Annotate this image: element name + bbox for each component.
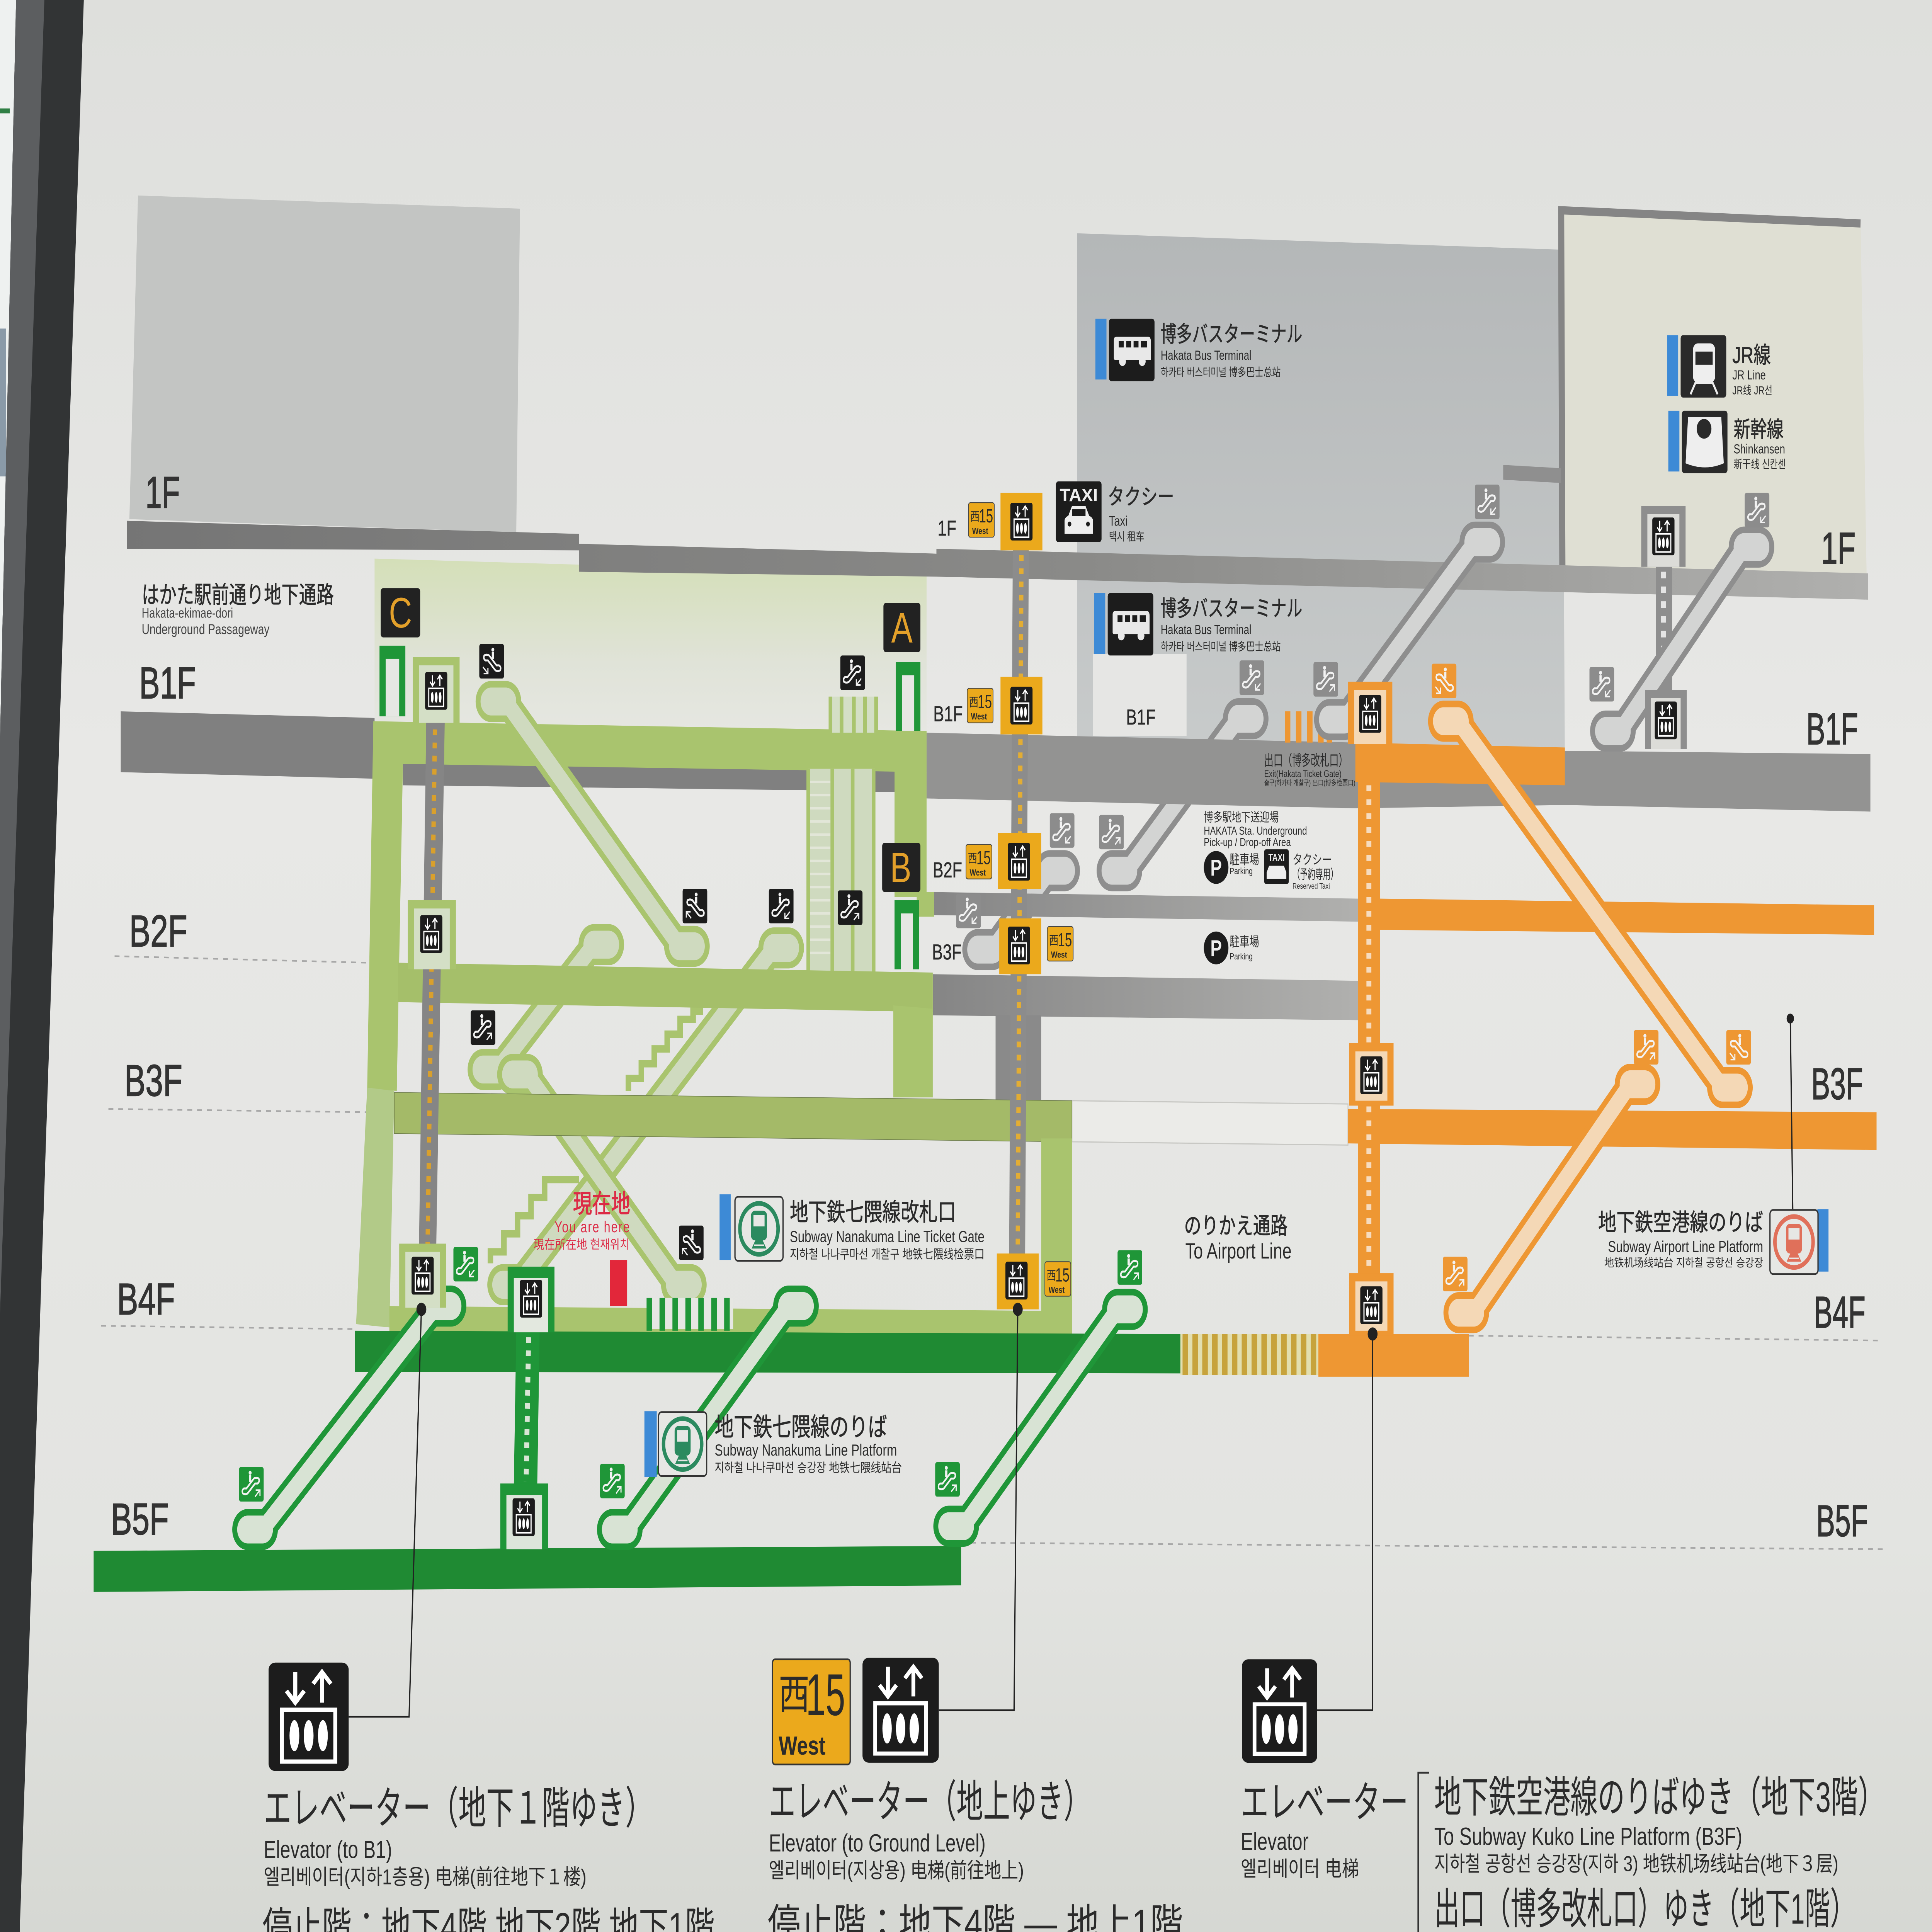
text: Hakata-ekimae-dori passage: Underground Passageway [142,621,270,638]
floor labels right [1806,523,1868,1546]
floor labels centre: B3F [932,940,961,964]
label: JR line: JR線 [1732,342,1771,368]
icon: west 15 bottom: 15 [806,1662,845,1728]
label: Nanakuma platform [645,1411,902,1477]
label: Nanakuma platform: 地下鉄七隈線のりば [714,1413,887,1442]
you are here marker: 現在地 [573,1190,630,1218]
label: Nanakuma platform: 지하철 나나쿠마선 승강장 地铁七隈线站台 [714,1461,902,1475]
label: bus terminal upper: 博多バスターミナル [1161,321,1303,347]
escalator: grey 1F to B1F [1330,542,1490,719]
label: Nanakuma ticket gate: 지하철 나나쿠마선 개찰구 地铁七隈线检票口 [790,1248,985,1262]
west 15 signs: 西 [970,509,980,524]
label: pick-up area: HAKATA Sta. Underground [1204,824,1307,837]
exit door: C [379,646,405,716]
label: pick-up area: 博多駅地下送迎場 [1204,811,1279,825]
reserved taxi: Reserved Taxi [1293,882,1330,891]
west 15 signs: West [1049,1285,1065,1295]
west 15 signs: 西 [969,695,978,709]
label: bus terminal lower: 하카타 버스터미널 博多巴士总站 [1161,640,1281,653]
reserved taxi: タクシー [1293,853,1332,867]
west 15 signs: 15 [1058,930,1072,951]
west 15 signs: West [972,526,988,536]
elevator shaft: centre [1009,542,1029,1257]
floor band: B3F orange [1348,1109,1877,1150]
floor labels right: B3F [1811,1059,1863,1109]
west 15 signs: West [1051,950,1067,960]
icon: west 15 bottom [772,1659,850,1764]
icon: elevator bottom right [1242,1659,1317,1763]
label: bus terminal lower: Hakata Bus Terminal [1161,623,1252,637]
west 15 signs: 西 [968,851,977,865]
floor labels left: B1F [139,658,196,708]
text: Hakata-ekimae-dori passage: Hakata-ekimae-dori [142,605,233,621]
exit marker: B: B [890,844,912,891]
escalator: grey JR 1F to B1F [1605,547,1759,731]
you are here marker [534,1190,630,1306]
text: elevator to ground [768,1777,1183,1932]
label: Nanakuma ticket gate: 地下鉄七隈線改札口 [790,1198,956,1226]
text: elevator to B1 [262,1783,714,1932]
label: pick-up area [1204,811,1307,849]
gold stripes: transfer passage [1180,1334,1318,1375]
exit marker: C: C [389,589,412,637]
gate stripes: platform gate [647,1298,733,1331]
escalator: grey B2F to B3F [978,871,1065,949]
label: Nanakuma platform: Subway Nanakuma Line Platform [714,1441,897,1459]
stairs: B3F to B4F [490,1180,579,1264]
escalator signs: orange [1432,664,1751,1291]
elevator shaft: dark green [514,1331,540,1487]
floor labels left: B3F [124,1056,182,1105]
icon: elevator bottom left [269,1663,349,1771]
escalator: orange B4F to B3F [1459,1084,1645,1313]
label: JR line: JR线 JR선 [1732,384,1772,397]
reserved taxi: TAXI [1269,852,1285,863]
west 15 signs [966,503,1073,1296]
label: Kuko line platform: Subway Airport Line Platform [1608,1238,1763,1255]
sign frame [0,0,84,1932]
floor labels right: B1F [1806,704,1858,754]
text: elevator right: 엘리베이터 电梯 [1241,1857,1359,1881]
floor labels left: 1F [145,468,180,517]
reserved taxi [1264,849,1338,891]
escalator: light green B3F to B2F [483,945,609,1070]
elevators: orange frames [1348,682,1394,1336]
west 15 signs: 15 [1055,1265,1070,1286]
escalator: grey behind B1F band [1112,719,1253,871]
floor labels centre: B2F [933,859,962,882]
label: Shinkansen: Shinkansen [1734,442,1785,456]
elevators: yellow frames [997,493,1043,1310]
floor band: B1F inner grey [403,761,896,792]
label: Shinkansen [1668,411,1786,473]
text: elevator right [1241,1779,1408,1881]
escalator: dark green B5F to B4F centre [612,1306,803,1529]
floor labels centre [932,517,1156,964]
icon: taxi: TAXI [1060,485,1098,505]
exit marker: B [882,843,920,892]
elevators: dark green frames [500,1267,554,1549]
parking lower [1204,932,1259,964]
escalator: dark green B5F to B4F left [248,1306,451,1529]
you are here marker: You are here [554,1218,629,1236]
panel: JR building [1503,209,1867,578]
floor band: B4F orange [1318,1334,1469,1377]
floor labels left: B2F [129,906,187,956]
label: Shinkansen: 新幹線 [1734,417,1784,442]
bracket [1418,1773,1429,1932]
orange shaft [1358,772,1380,1339]
parking upper [1204,851,1259,884]
escalator: orange B1F to B3F [1444,721,1737,1088]
label: Nanakuma ticket gate [719,1194,985,1262]
west 15 signs: 15 [976,847,991,869]
label: Kuko line platform: 地下鉄空港線のりば [1598,1209,1763,1236]
icon: elevator bottom centre [862,1658,939,1763]
parking upper: 駐車場 [1230,853,1259,867]
label: JR line: JR Line [1732,368,1766,383]
wall at the left edge [0,0,17,772]
icon: Shinkansen [1682,411,1728,473]
west 15 signs: West [971,712,987,722]
exit door: B [895,900,919,969]
label: bus terminal upper: 하카타 버스터미널 博多巴士总站 [1161,366,1281,379]
passage band: to airport line [1072,1101,1348,1145]
elevator shaft: JR [1656,565,1672,693]
floor band: B2F orange [1380,899,1874,935]
text: elevator to B1: エレベーター（地下１階ゆき） [264,1783,653,1833]
escalator signs: grey [956,485,1769,928]
label: exit Hakata ticket gate: 출구(하카타 개찰구) 出口(博多检票口) [1264,778,1355,787]
parking lower: 駐車場 [1230,935,1259,949]
exit door: A [896,662,920,731]
text: Hakata-ekimae-dori passage [142,582,334,638]
floor band: B1F centre [927,733,1871,811]
floor labels centre: B1F [1126,706,1156,729]
text: elevator to ground: Elevator (to Ground Level) [769,1829,986,1857]
label: Kuko line platform [1598,1014,1828,1274]
elevators: light green frames [399,657,459,1308]
label: JR line [1667,335,1772,398]
stairs and gate area: B1F to B2F [808,769,875,973]
label: exit Hakata ticket gate: Exit(Hakata Ticket Gate) [1264,768,1342,779]
floor labels left: B4F [117,1274,175,1324]
label: bus terminal lower: 博多バスターミナル [1161,596,1303,621]
west 15 signs: 西 [1047,1269,1056,1282]
parking upper: Parking [1230,866,1253,876]
label: taxi: Taxi [1109,513,1128,529]
text: Hakata-ekimae-dori passage: はかた駅前通り地下通路 [142,582,334,608]
floor labels right: 1F [1821,523,1855,573]
reserved taxi: （予約専用） [1293,867,1338,882]
parking lower: Parking [1230,952,1253,962]
elevator shaft: green side [419,716,445,1252]
west 15 signs: 15 [978,691,992,713]
label: taxi [1056,481,1174,543]
floor band: B2F grey [934,892,1358,922]
text: elevator right: エレベーター [1241,1779,1408,1826]
escalator signs: black [471,644,865,1260]
escalator: light green long B2F to B4F [503,948,789,1285]
exit marker: A [883,603,920,652]
floor labels centre: 1F [938,517,956,540]
label: bus terminal upper: Hakata Bus Terminal [1161,349,1252,363]
text: elevator right: Elevator [1241,1828,1309,1855]
label: transfer passage: のりかえ通路 [1184,1213,1287,1239]
leader line: elevator to B1 [349,1304,426,1717]
grey stub under centre shaft [996,1015,1041,1101]
text: elevator to ground: 엘리베이터(지상용) 电梯(前往地上) [769,1859,1024,1883]
text: elevator destinations [1434,1774,1885,1932]
floor band: B4F dark green [355,1331,1180,1373]
label: pick-up area: Pick-up / Drop-off Area [1204,835,1291,849]
escalator: dark green B5F to B4F right [949,1310,1132,1526]
gate stripes: A [830,697,876,733]
exit marker: A: A [891,604,913,651]
icon: taxi [1056,481,1102,542]
label: Shinkansen: 新干线 신칸센 [1734,458,1786,471]
label: exit Hakata ticket gate [1264,752,1355,787]
stairs: B2F to B3F [628,1011,703,1091]
grey block: top left building [129,196,520,532]
text: elevator to B1: 엘리베이터(지하1층용) 电梯(前往地下１楼) [264,1866,587,1889]
light green lower bands [356,963,1072,1334]
floor band: B1F left [121,711,374,779]
floor band: B1F orange [1355,743,1565,785]
label: taxi: タクシー [1108,484,1174,509]
elevators: grey frames [1641,506,1687,749]
floor labels left [111,468,196,1544]
icon: west 15 bottom: 西 [779,1672,810,1717]
label: exit Hakata ticket gate: 出口（博多改札口） [1264,752,1348,769]
leader line: elevator right [1317,1328,1377,1710]
you are here marker: 現在所在地 현재위치 [534,1237,629,1251]
text: elevator to B1: Elevator (to B1) [264,1836,392,1863]
icon: JR train [1680,335,1726,398]
exit marker: C [381,588,420,638]
floor band: 1F [127,521,1868,600]
escalator signs: green [239,1247,1142,1502]
floor band: B3F grey [933,974,1358,1020]
pale green concourse area [374,559,927,733]
escalator: light green long B3F to B4F [513,1075,691,1285]
text: elevator destinations: To Subway Kuko Line Platform (B3F) [1434,1823,1742,1850]
icon: west 15 bottom: West [779,1731,825,1760]
leader line: elevator to ground [939,1304,1022,1710]
label: bus terminal lower [1094,593,1303,655]
west 15 signs: West [970,868,986,878]
escalator: light green B1F to B2F [491,701,694,946]
floor labels right: B5F [1816,1496,1868,1546]
parking upper: P [1210,855,1222,881]
floor labels centre: B1F [933,702,963,726]
orange gate stripes [1287,711,1330,743]
grey block: bus terminal area [1077,233,1565,756]
label: transfer passage: To Airport Line [1185,1238,1292,1263]
text: elevator to ground: エレベーター（地上ゆき） [769,1777,1090,1827]
west 15 signs: 西 [1049,933,1058,947]
text: elevator destinations: 지하철 공항선 승강장(지하 3) 地铁机场线站台(地下３层) [1434,1852,1838,1876]
floor labels left: B5F [111,1494,169,1544]
floor band: B5F dark green [94,1546,961,1592]
label: taxi: 택시 租车 [1109,530,1145,543]
label: Nanakuma ticket gate: Subway Nanakuma Line Ticket Gate [790,1228,985,1245]
label: transfer passage [1184,1213,1292,1263]
label: Kuko line platform: 地铁机场线站台 지하철 공항선 승강장 [1604,1256,1763,1269]
label: bus terminal upper [1095,319,1303,381]
floor labels right: B4F [1814,1287,1866,1337]
dashed floor lines [101,956,1883,1549]
light green top band and columns [367,721,934,1091]
west 15 signs: 15 [979,506,993,527]
parking lower: P [1210,935,1222,961]
